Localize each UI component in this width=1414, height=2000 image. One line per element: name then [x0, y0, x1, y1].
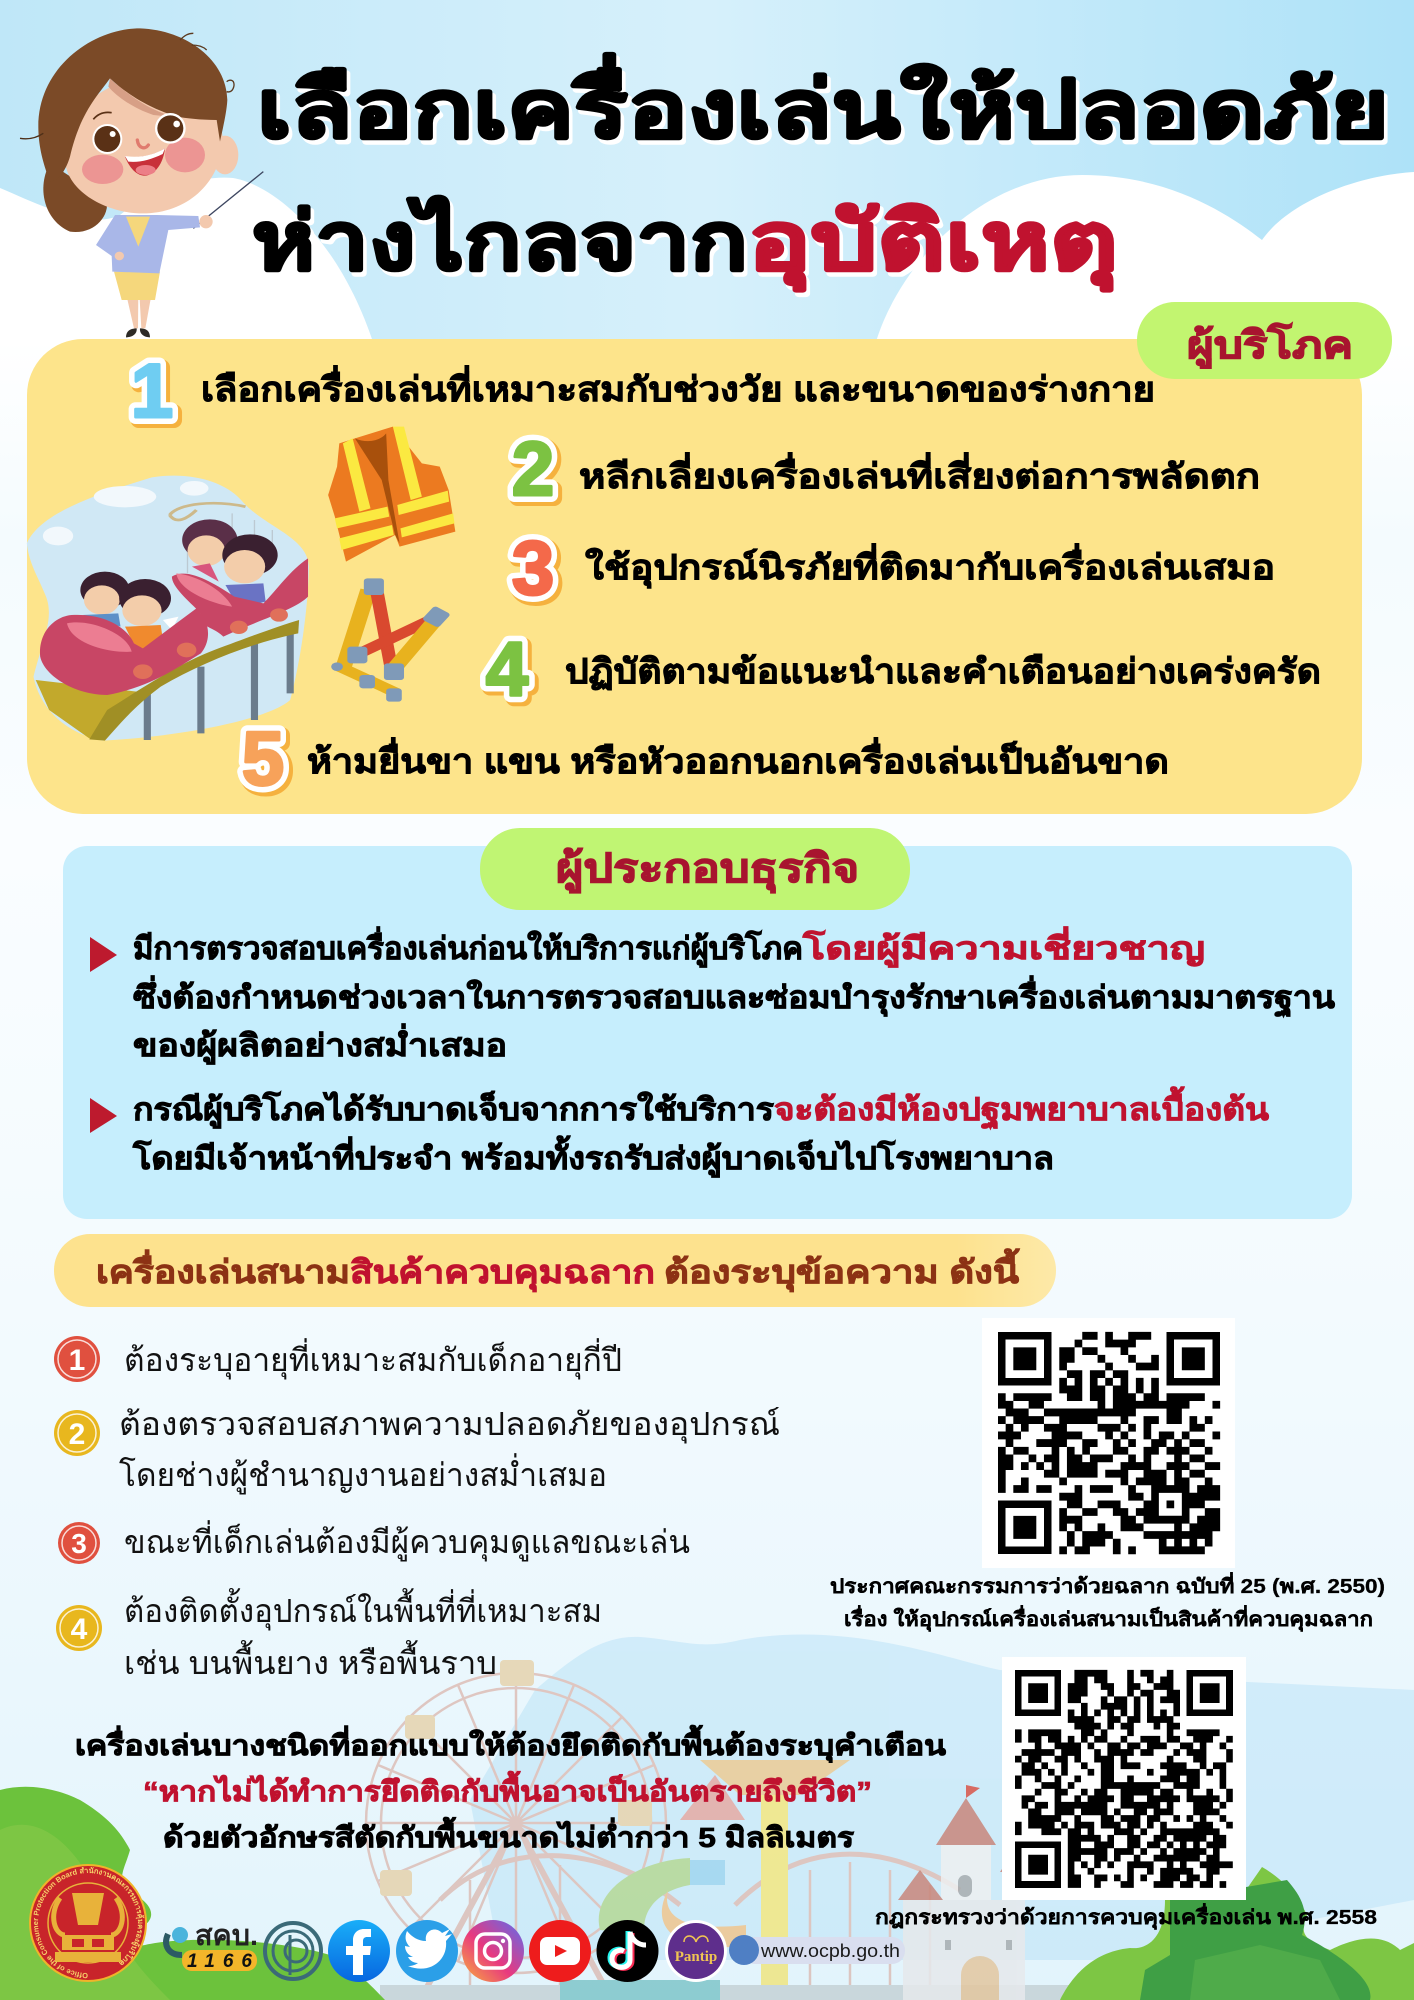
rear car — [172, 558, 308, 637]
text block: inspection: มีการตรวจสอบเครื่องเล่นก่อนให้บริการแก่ผู้บริโภค — [133, 926, 803, 968]
logo: hotline 1166: สคบ. — [195, 1920, 258, 1952]
text block: inspection: ซึ่งต้องกำหนดช่วงเวลาในการตรวจสอบและซ่อมบำรุงรักษาเครื่องเล่นตามมาตรฐาน — [133, 975, 1335, 1018]
number 1: 1 — [134, 352, 176, 437]
skirt — [114, 272, 160, 300]
list item 4: เช่น บนพื้นยาง หรือพื้นราบ — [124, 1640, 497, 1681]
cheeks — [82, 155, 123, 184]
number 5: 5 — [242, 717, 284, 802]
list item 1: ต้องระบุอายุที่เหมาะสมกับเด็กอายุกี่ปี — [124, 1338, 622, 1380]
left hill — [0, 1787, 385, 2000]
logo: CP — [265, 1923, 321, 1979]
number 2: 2 — [515, 430, 557, 515]
badge 1: 1 — [69, 1344, 85, 1377]
ear — [212, 136, 238, 174]
heading pill: label control — [54, 1234, 1056, 1307]
eyes — [92, 124, 122, 154]
caption: QR 2: กฎกระทรวงว่าด้วยการควบคุมเครื่องเล่น พ.ศ. 2558 — [875, 1902, 1377, 1930]
list item 3: ขณะที่เด็กเล่นต้องมีผู้ควบคุมดูแลขณะเล่น — [124, 1520, 690, 1562]
hand — [199, 215, 213, 228]
heading pill: label control: ต้องระบุข้อความ ดังนี้ — [664, 1248, 1020, 1293]
badge: consumer — [1137, 302, 1392, 379]
illustration: safety vest — [328, 427, 455, 562]
icon: facebook — [328, 1920, 390, 1982]
number 4: 4 — [489, 630, 531, 715]
text block: warning: เครื่องเล่นบางชนิดที่ออกแบบให้ต้องยึดติดกับพื้นต้องระบุคำเตือน — [75, 1724, 946, 1763]
list item 2: โดยช่างผู้ชำนาญงานอย่างสม่ำเสมอ — [119, 1453, 607, 1495]
heading pill: label control: เครื่องเล่นสนาม — [96, 1249, 350, 1290]
hair bun — [43, 163, 107, 232]
text block: inspection: โดยผู้มีความเชี่ยวชาญ — [802, 926, 1205, 968]
bullet arrow — [90, 937, 117, 972]
number 1: 1 — [131, 349, 173, 434]
text block: first aid: กรณีผู้บริโภคได้รับบาดเจ็บจากการใช้บริการ — [133, 1090, 774, 1129]
QR code 1 — [982, 1318, 1235, 1568]
badge: business operators — [480, 828, 910, 910]
text block: warning: “หากไม่ได้ทำการยึดติดกับพื้นอาจเป็นอันตรายถึงชีวิต” — [143, 1770, 872, 1807]
badge 2: 2 — [69, 1418, 85, 1451]
list item 2: ต้องตรวจสอบสภาพความปลอดภัยของอุปกรณ์ — [119, 1406, 780, 1444]
background: pale amusement park scene — [366, 1634, 1414, 2000]
badge: consumer: ผู้บริโภค — [1187, 322, 1353, 369]
logo: hotline 1166: 1166 — [187, 1951, 252, 1972]
heading pill: label control: สินค้าควบคุมฉลาก — [350, 1254, 655, 1293]
title: เลือกเครื่องเล่นให้ปลอดภัย — [257, 53, 1389, 154]
title: ห่างไกลจาก — [255, 199, 751, 290]
badge 1 — [54, 1336, 100, 1382]
website badge — [729, 1935, 905, 1965]
logo: consumer protection board seal: Office of the Consumer Protection Board สำนักงานคณะกรรมการคุ้มครองผู้บริโภค — [34, 1867, 144, 1978]
caption: QR 1: ประกาศคณะกรรมการว่าด้วยฉลาก ฉบับที่ 25 (พ.ศ. 2550) — [830, 1571, 1385, 1598]
badge 4 — [56, 1605, 102, 1651]
badge 4: 4 — [71, 1613, 88, 1646]
item 1: เลือกเครื่องเล่นที่เหมาะสมกับช่วงวัย และขนาดของร่างกาย — [201, 365, 1155, 409]
panel: consumer — [27, 302, 1392, 814]
item 5: ห้ามยื่นขา แขน หรือหัวออกนอกเครื่องเล่นเป็นอันขาด — [307, 737, 1169, 781]
number 3: 3 — [515, 529, 557, 614]
front riders — [80, 572, 179, 653]
face — [65, 83, 223, 213]
illustration: safety harness — [331, 578, 451, 702]
title: เลือกเครื่องเล่นให้ปลอดภัย — [260, 57, 1392, 158]
text block: first aid: จะต้องมีห้องปฐมพยาบาลเบื้องต้น — [774, 1086, 1269, 1130]
right hill — [1060, 1867, 1414, 2000]
icon: instagram — [462, 1920, 524, 1982]
number 5: 5 — [245, 720, 287, 805]
item 3: ใช้อุปกรณ์นิรภัยที่ติดมากับเครื่องเล่นเสมอ — [585, 543, 1275, 589]
hair — [38, 28, 227, 182]
website badge: www.ocpb.go.th — [760, 1941, 900, 1961]
illustration: roller coaster — [27, 476, 309, 741]
number 2: 2 — [512, 427, 554, 512]
number 4: 4 — [486, 627, 528, 712]
numbered list — [54, 1336, 780, 1681]
title: อุบัติเหตุ — [748, 197, 1118, 292]
jacket — [96, 215, 200, 273]
badge 3: 3 — [71, 1528, 87, 1559]
pointer stick — [193, 172, 263, 228]
text block: inspection: ของผู้ผลิตอย่างสม่ำเสมอ — [133, 1023, 507, 1065]
title: ห่างไกลจาก — [252, 195, 748, 286]
icon: twitter — [396, 1920, 458, 1982]
title — [252, 53, 1392, 296]
text block: warning — [75, 1724, 946, 1853]
text block: first aid: โดยมีเจ้าหน้าที่ประจำ พร้อมทั้งรถรับส่งผู้บาดเจ็บไปโรงพยาบาล — [132, 1135, 1054, 1178]
caption: QR 1: เรื่อง ให้อุปกรณ์เครื่องเล่นสนามเป็นสินค้าที่ควบคุมฉลาก — [844, 1604, 1373, 1632]
title: อุบัติเหตุ — [751, 201, 1121, 296]
badge: business operators: ผู้ประกอบธุรกิจ — [556, 847, 859, 894]
number 3: 3 — [512, 526, 554, 611]
logo: hotline 1166 — [166, 1920, 258, 1972]
number 2: 2 — [512, 427, 554, 512]
nose — [137, 140, 148, 148]
text block: warning: ด้วยตัวอักษรสีตัดกับพื้นขนาดไม่ต่ำกว่า 5 มิลลิเมตร — [163, 1816, 854, 1853]
list item 2 — [119, 1406, 780, 1495]
text block: first aid — [132, 1086, 1269, 1178]
bullet arrow — [90, 1098, 117, 1133]
QR code 2 — [1002, 1657, 1246, 1900]
icon: youtube — [529, 1920, 591, 1982]
mouth — [125, 148, 165, 176]
number 4: 4 — [486, 627, 528, 712]
text block: inspection — [133, 926, 1335, 1065]
number 1: 1 — [131, 349, 173, 434]
background: castle — [898, 1785, 1036, 2000]
badge 2 — [54, 1410, 100, 1456]
list item 4 — [124, 1588, 602, 1681]
number 5: 5 — [242, 717, 284, 802]
list item 4: ต้องติดตั้งอุปกรณ์ในพื้นที่ที่เหมาะสม — [124, 1588, 602, 1631]
caption: QR 1 — [830, 1571, 1385, 1632]
legs and shoes — [126, 293, 152, 337]
rear riders — [182, 519, 278, 608]
icon: tiktok — [596, 1920, 658, 1982]
character: teacher with pointer — [20, 28, 263, 337]
icon: pantip: Pantip — [675, 1949, 717, 1965]
badge 3 — [58, 1522, 100, 1564]
number 3: 3 — [512, 526, 554, 611]
item 4: ปฏิบัติตามข้อแนะนำและคำเตือนอย่างเคร่งครัด — [565, 653, 1321, 691]
item 2: หลีกเลี่ยงเครื่องเล่นที่เสี่ยงต่อการพลัดตก — [579, 452, 1260, 496]
icon: pantip — [665, 1920, 727, 1982]
front car — [40, 608, 208, 695]
panel: business operators — [63, 828, 1352, 1219]
